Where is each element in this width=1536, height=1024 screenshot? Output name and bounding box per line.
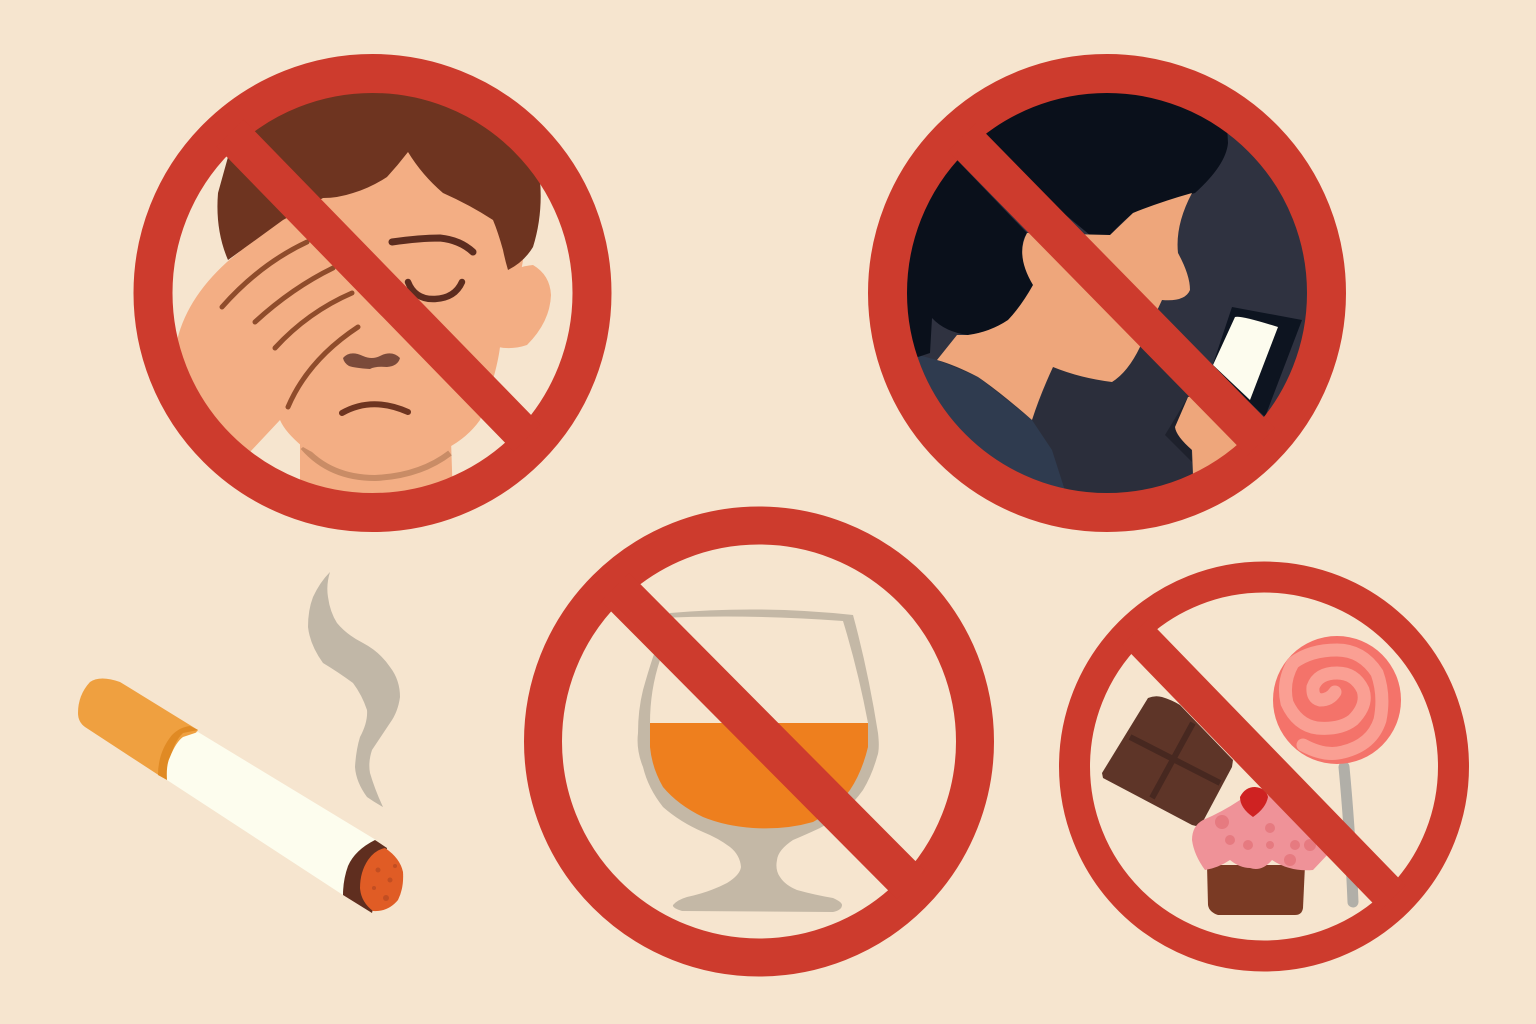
dark body [1032,347,1240,500]
closed eye [408,282,462,299]
filter band [158,726,198,780]
lollipop [1273,636,1401,764]
lollipop stick [1344,767,1353,902]
cherry [1240,787,1268,817]
skin: face and neck [937,193,1192,420]
dark background [921,133,1307,420]
brow [392,238,473,252]
face [240,152,524,452]
glass interior [650,617,868,723]
lighter shoulder [918,356,1064,488]
slash [962,137,1261,442]
glass [638,609,879,912]
prohibition ring [543,526,975,958]
mouth [342,404,408,413]
prohibition ring [153,74,592,512]
ear [498,265,551,348]
prohibition ring [888,74,1326,512]
slash [230,133,527,438]
tip rim [343,840,387,913]
slash [1135,632,1393,898]
nose [343,353,400,369]
phone screen [1213,317,1278,400]
icon: no tired face [153,74,592,512]
hand shadow [1165,397,1192,462]
burning tip [360,848,403,911]
phone [1212,307,1302,417]
chocolate [1102,696,1233,827]
hand [1175,396,1237,474]
hand [178,242,280,452]
neck [300,444,452,493]
frosting mottling [1215,815,1316,866]
icon: no alcohol [543,526,975,958]
back hair [895,160,1033,357]
icon: no phone at night [888,74,1326,512]
slash [615,587,911,885]
cigarette body [167,732,376,895]
filter [78,678,198,776]
icon: no sweets [1074,577,1454,956]
neck crease [303,447,450,478]
hair [986,93,1228,235]
prohibition ring [1074,577,1454,956]
lollipop swirl [1285,650,1382,753]
icon: cigarette with smoke [78,572,403,913]
chocolate grooves [1130,723,1220,798]
tip specks [372,864,397,901]
cupcake base [1207,865,1305,915]
hand wrinkle lines [222,242,358,407]
smoke [308,572,400,807]
hair [217,85,541,270]
cupcake frosting [1192,793,1330,870]
liquid [650,723,868,828]
